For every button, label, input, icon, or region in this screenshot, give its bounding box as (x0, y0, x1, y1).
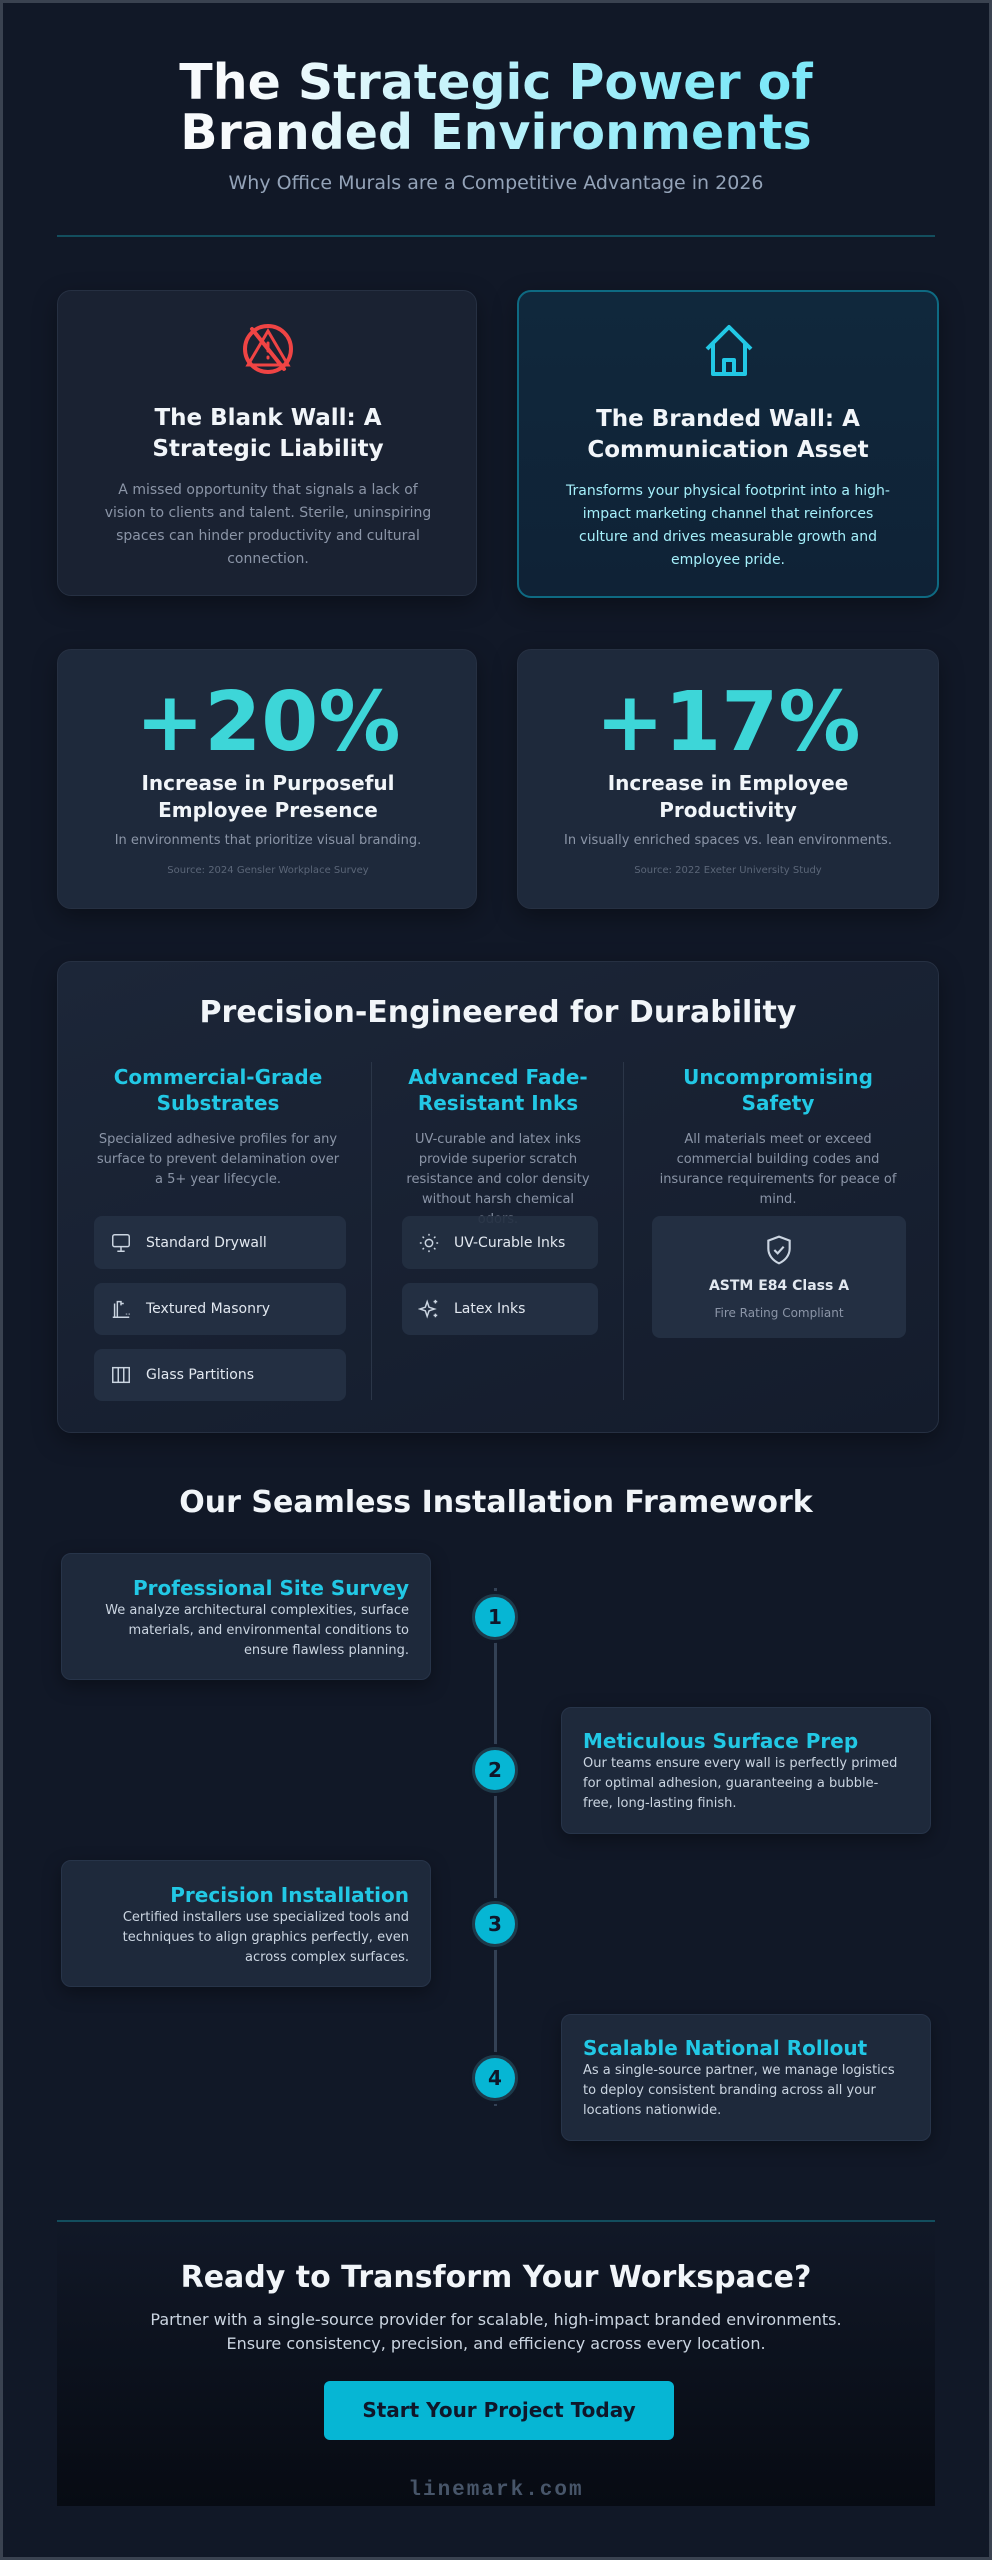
subtitle: Why Office Murals are a Competitive Advantage in 2026 (228, 172, 764, 194)
item: latex (402, 1283, 598, 1335)
desc: In visually enriched spaces vs. lean environments. (564, 833, 892, 848)
big number: +20% (136, 675, 400, 770)
column: substrates (94, 1065, 346, 1401)
column: substrates: Specialized adhesive profiles for any surface to prevent delamination over a 5+ year lifecycle. (97, 1132, 339, 1187)
column: inks: UV-curable and latex inks provide superior scratch resistance and color density without harsh chemical odors. (406, 1132, 590, 1227)
source: Source: 2024 Gensler Workplace Survey (167, 865, 369, 876)
step 4: As a single-source partner, we manage logistics to deploy consistent branding across all your locations nationwide. (583, 2063, 895, 2118)
item: drywall (94, 1216, 346, 1269)
column: inks: Advanced Fade- (408, 1065, 588, 1089)
text: A missed opportunity that signals a lack of vision to clients and talent. Sterile, uninspiring spaces can hinder productivity and cultural connection. (105, 482, 431, 567)
panel: blank wall (57, 290, 477, 596)
timeline: 1 (488, 1605, 502, 1629)
source: Source: 2022 Exeter University Study (634, 865, 822, 876)
timeline: 4 (488, 2066, 502, 2090)
step 2: Meticulous Surface Prep (583, 1729, 858, 1753)
stat card 2 (517, 649, 939, 909)
big number: +17% (596, 675, 860, 770)
title: The Strategic Power of (179, 54, 813, 111)
desc: In environments that prioritize visual branding. (115, 833, 421, 848)
column: substrates: Commercial-Grade (114, 1065, 322, 1089)
column: safety: All materials meet or exceed commercial building codes and insurance requirements for peace of mind. (660, 1132, 896, 1207)
icon: house (706, 324, 752, 376)
badge: ASTM: ASTM E84 Class A (709, 1278, 849, 1294)
heading: The Blank Wall: A (154, 405, 382, 431)
label: Increase in Purposeful (141, 771, 395, 795)
item: glass: Glass Partitions (146, 1367, 254, 1383)
column: safety: Safety (742, 1091, 814, 1115)
stat card 1 (57, 649, 477, 909)
item: uv (402, 1216, 598, 1269)
heading (152, 405, 384, 462)
item: glass (94, 1349, 346, 1401)
item: latex: Latex Inks (454, 1301, 525, 1317)
item: uv: UV-Curable Inks (454, 1234, 565, 1250)
heading: installation: Our Seamless Installation Framework (179, 1485, 813, 1520)
item: masonry (94, 1283, 346, 1335)
step 1 (61, 1553, 431, 1680)
label (141, 771, 395, 822)
heading: Communication Asset (587, 437, 869, 463)
step 3: Precision Installation (170, 1883, 409, 1907)
step 1: We analyze architectural complexities, surface materials, and environmental conditions to ensure flawless planning. (105, 1603, 409, 1658)
CTA text (150, 2310, 842, 2353)
icon: alert crossed (243, 324, 293, 374)
item: drywall: Standard Drywall (146, 1234, 267, 1250)
timeline: 3 (488, 1912, 502, 1936)
column: substrates: Substrates (157, 1091, 279, 1115)
panel: branded wall (517, 290, 939, 598)
label (608, 771, 848, 822)
CTA heading: Ready to Transform Your Workspace? (181, 2260, 811, 2295)
label: Increase in Employee (608, 771, 848, 795)
text (566, 483, 890, 568)
heading: Precision-Engineered for Durability (200, 995, 796, 1030)
button: Start Your Project Today (362, 2398, 636, 2422)
footer brand: linemark.com (408, 2479, 584, 2502)
badge: ASTM: Fire Rating Compliant (714, 1306, 844, 1320)
heading (587, 406, 869, 463)
column: inks: Resistant Inks (418, 1091, 578, 1115)
step 1: Professional Site Survey (133, 1576, 409, 1600)
heading: Strategic Liability (152, 436, 384, 462)
step 3 (61, 1860, 431, 1987)
item: masonry: Textured Masonry (146, 1301, 270, 1317)
timeline: 2 (488, 1758, 502, 1782)
CTA text: Partner with a single-source provider for scalable, high-impact branded environments. (150, 2310, 842, 2329)
title (3, 58, 989, 158)
step 4 (561, 2014, 931, 2141)
timeline (61, 1553, 931, 2145)
label: Employee Presence (158, 798, 378, 822)
column: safety: Uncompromising (683, 1065, 873, 1089)
column: inks (402, 1065, 598, 1335)
heading: The Branded Wall: A (596, 406, 860, 432)
button (324, 2381, 674, 2440)
column: safety (652, 1065, 906, 1338)
step 3: Certified installers use specialized tools and techniques to align graphics perfectly, even across complex surfaces. (123, 1910, 409, 1965)
title: Branded Environments (180, 104, 812, 161)
label: Productivity (659, 798, 797, 822)
badge: ASTM (652, 1216, 906, 1338)
text: Transforms your physical footprint into a high-impact marketing channel that reinforces (566, 483, 890, 522)
CTA text: Ensure consistency, precision, and efficiency across every location. (226, 2334, 766, 2353)
step 4: Scalable National Rollout (583, 2036, 867, 2060)
step 2: Our teams ensure every wall is perfectly primed for optimal adhesion, guaranteeing a bubble-free, long-lasting finish. (583, 1756, 897, 1811)
step 2 (561, 1707, 931, 1834)
text: culture and drives measurable growth and employee pride. (579, 529, 877, 568)
panel: durability (57, 961, 939, 1433)
panel: CTA (57, 2222, 935, 2506)
